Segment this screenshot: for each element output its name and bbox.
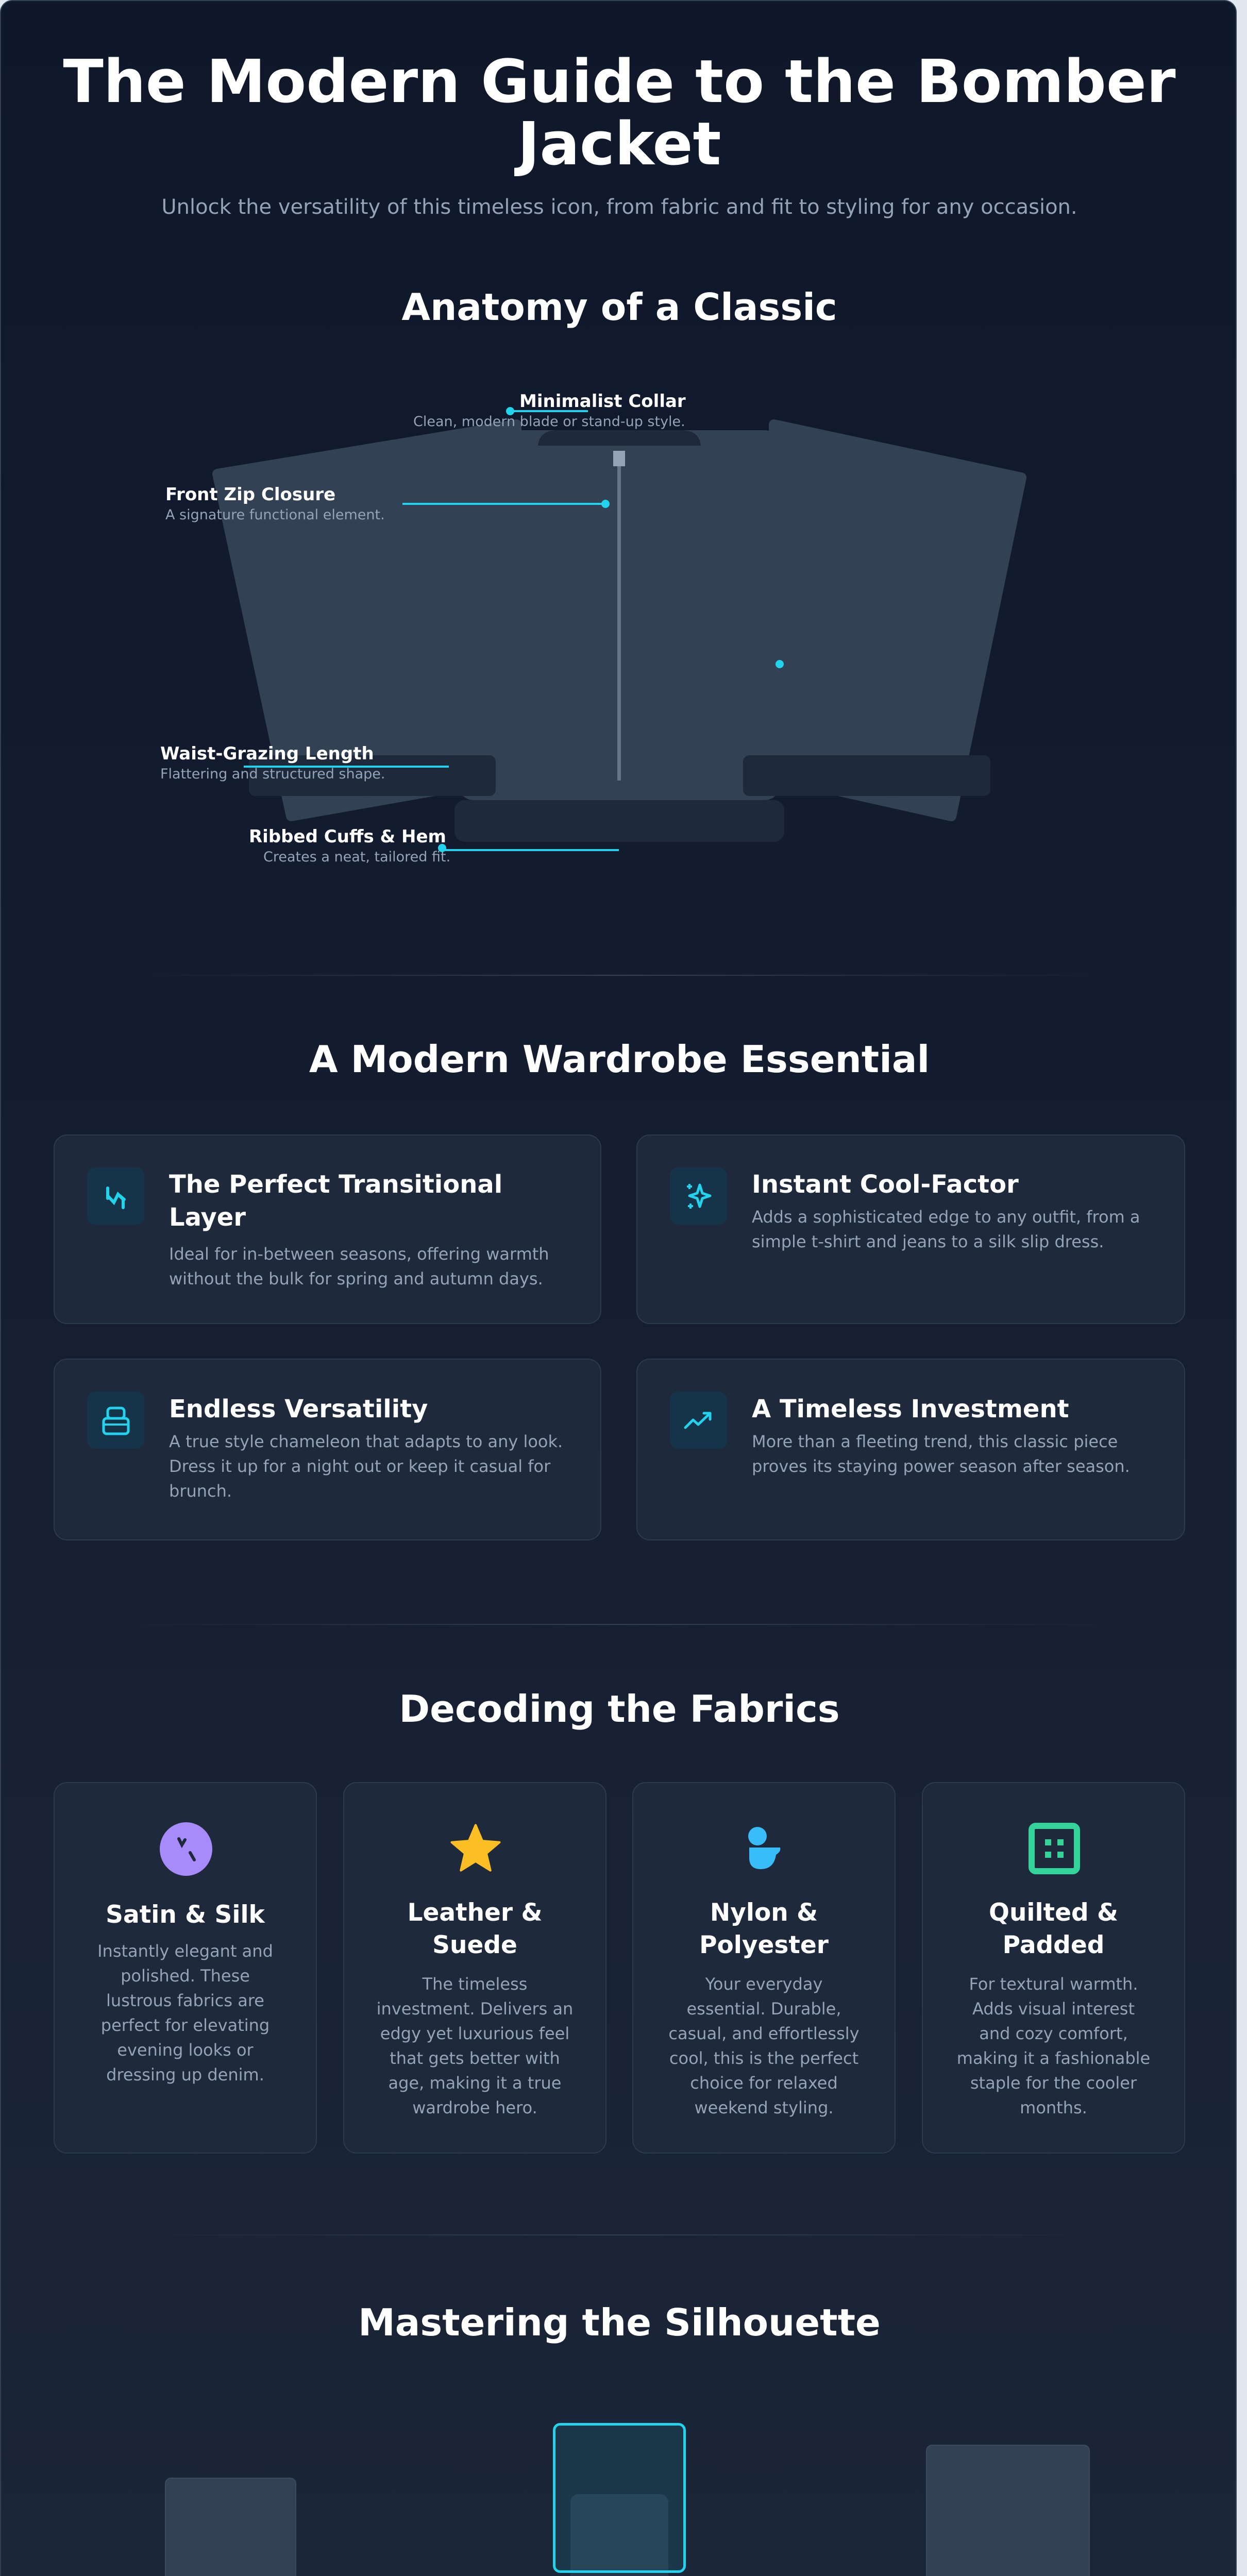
card: nylon: casual, and effortlessly <box>668 2024 860 2043</box>
title: Jacket <box>518 110 721 179</box>
card: satin: evening looks or <box>117 2040 254 2060</box>
card: nylon: choice for relaxed <box>690 2073 838 2093</box>
label: cuffs: Ribbed Cuffs & Hem <box>249 826 446 847</box>
card: nylon: weekend styling. <box>694 2098 834 2117</box>
figure: oversized <box>926 2445 1090 2576</box>
card: investment: More than a fleeting trend, this classic piece <box>752 1432 1118 1451</box>
card: leather: investment. Delivers an <box>377 1999 573 2019</box>
card: leather: age, making it a true <box>389 2073 561 2093</box>
card: satin: lustrous fabrics are <box>106 1991 264 2010</box>
left sleeve <box>217 425 516 816</box>
label: zip: A signature functional element. <box>165 507 385 523</box>
hem <box>454 800 784 842</box>
card: satin <box>54 1782 317 2154</box>
card: leather: wardrobe hero. <box>412 2098 537 2117</box>
card: quilted <box>922 1782 1185 2154</box>
card: nylon <box>632 1782 896 2154</box>
card: transitional <box>54 1134 601 1324</box>
card: transitional: Layer <box>169 1203 246 1232</box>
figure: cropped <box>553 2423 686 2576</box>
heading: fabrics: Decoding the Fabrics <box>399 1687 840 1731</box>
figure: classic <box>165 2478 296 2576</box>
label: zip: Front Zip Closure <box>165 484 335 505</box>
zipper <box>613 451 625 781</box>
icon: trend <box>670 1392 727 1449</box>
label: cuffs <box>249 826 450 865</box>
heading: essentials: A Modern Wardrobe Essential <box>309 1038 930 1081</box>
card: transitional: Ideal for in-between seasons, offering warmth <box>169 1244 549 1264</box>
card: versatility: brunch. <box>169 1481 232 1501</box>
body <box>458 430 780 800</box>
card: investment: proves its staying power season after season. <box>752 1456 1130 1476</box>
card: leather: that gets better with <box>390 2048 560 2068</box>
label: length: Waist-Grazing Length <box>160 743 374 764</box>
icon: sparkles <box>670 1167 727 1225</box>
card: satin: Satin & Silk <box>106 1901 265 1929</box>
card: versatility: Endless Versatility <box>169 1395 428 1423</box>
collar <box>538 430 701 446</box>
label: length: Flattering and structured shape. <box>160 766 385 782</box>
card: nylon: Your everyday <box>705 1974 822 1994</box>
card: transitional: without the bulk for spring and autumn days. <box>169 1269 543 1289</box>
card: leather: The timeless <box>423 1974 527 1994</box>
card: quilted: Adds visual interest <box>972 1999 1135 2019</box>
card: quilted: making it a fashionable <box>957 2048 1150 2068</box>
subtitle: Unlock the versatility of this timeless icon, from fabric and fit to styling for any occasion. <box>161 195 1077 219</box>
label: collar <box>413 391 686 430</box>
card: leather: edgy yet luxurious feel <box>380 2024 569 2043</box>
card: nylon: cool, this is the perfect <box>669 2048 858 2068</box>
icon: satin <box>160 1822 212 1876</box>
card: satin: Instantly elegant and <box>97 1941 273 1961</box>
label: collar: Minimalist Collar <box>519 391 686 412</box>
card: versatility <box>54 1359 601 1540</box>
card: quilted: and cozy comfort, <box>979 2024 1128 2043</box>
card: satin: dressing up denim. <box>106 2065 264 2084</box>
card: cool factor: simple t-shirt and jeans to a silk slip dress. <box>752 1232 1104 1251</box>
title <box>63 47 1176 179</box>
card: transitional: The Perfect Transitional <box>169 1170 502 1199</box>
card: nylon: Polyester <box>699 1931 829 1959</box>
cuffs <box>249 755 990 796</box>
card: quilted: For textural warmth. <box>969 1974 1138 1994</box>
card: nylon: Nylon & <box>710 1899 818 1927</box>
card: investment <box>636 1359 1185 1540</box>
card: cool factor: Instant Cool-Factor <box>752 1170 1019 1199</box>
icon: star <box>450 1824 501 1872</box>
card: leather <box>343 1782 606 2154</box>
card: quilted: Quilted & <box>989 1899 1118 1927</box>
card: quilted: staple for the cooler <box>970 2073 1137 2093</box>
card: leather: Leather & <box>408 1899 542 1927</box>
icon: drop <box>748 1827 780 1869</box>
icon: bag <box>87 1392 144 1449</box>
heading: anatomy: Anatomy of a Classic <box>401 285 837 329</box>
icon: grid <box>1029 1823 1080 1874</box>
jacket diagram <box>212 407 1026 852</box>
card: leather: Suede <box>432 1931 517 1959</box>
connector lines <box>244 407 619 852</box>
card: versatility: A true style chameleon that adapts to any look. <box>169 1432 563 1451</box>
card: quilted: months. <box>1020 2098 1087 2117</box>
card: quilted: Padded <box>1003 1931 1104 1959</box>
card: nylon: essential. Durable, <box>686 1999 841 2019</box>
card: investment: A Timeless Investment <box>752 1395 1069 1423</box>
hotspot dot <box>776 660 784 668</box>
card: satin: polished. These <box>121 1966 250 1986</box>
icon: arrows <box>87 1167 144 1225</box>
card: cool factor: Adds a sophisticated edge to any outfit, from a <box>752 1207 1140 1227</box>
card: satin: perfect for elevating <box>101 2015 269 2035</box>
card: versatility: Dress it up for a night out or keep it casual for <box>169 1456 550 1476</box>
right sleeve <box>774 425 1021 816</box>
label: length <box>160 743 385 782</box>
label: zip <box>165 484 385 523</box>
label: cuffs: Creates a neat, tailored fit. <box>263 849 450 865</box>
card: cool factor <box>636 1134 1185 1324</box>
label: collar: Clean, modern blade or stand-up style. <box>413 414 685 430</box>
title: The Modern Guide to the Bomber <box>63 47 1176 116</box>
heading: silhouette: Mastering the Silhouette <box>358 2301 881 2344</box>
